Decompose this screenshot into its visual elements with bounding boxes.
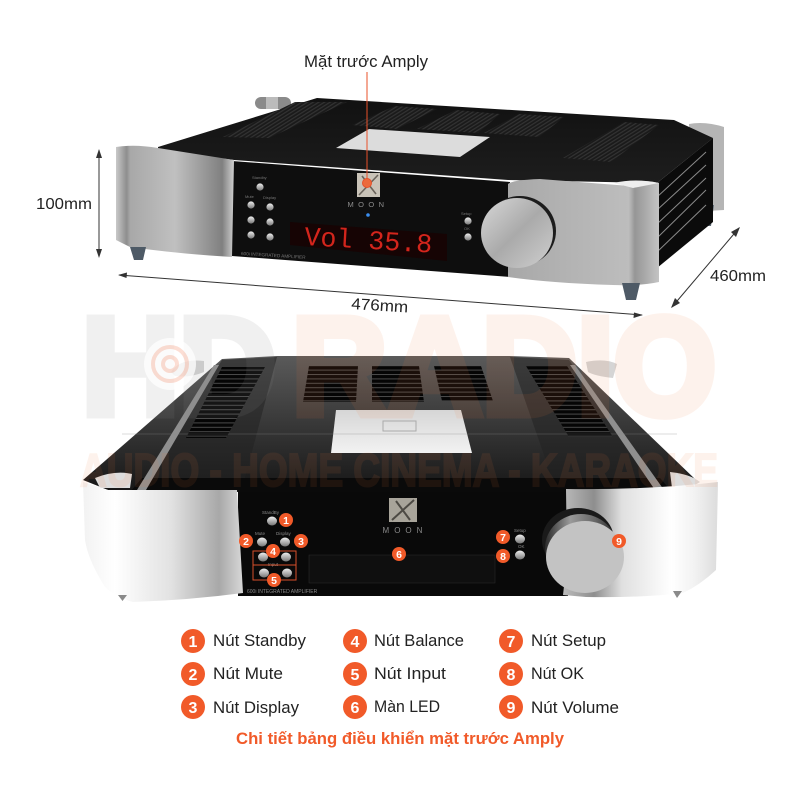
- front black panel: [232, 161, 510, 277]
- top amp small labels: Standby: [252, 175, 267, 180]
- numbered badges: 6: [396, 549, 402, 561]
- legend item 2: 2: [189, 667, 198, 684]
- watermark RADIO: RADIO: [292, 290, 716, 444]
- depth arrow 460mm: [671, 227, 740, 308]
- right rear foot: [700, 205, 714, 226]
- legend item 7: [499, 629, 606, 653]
- top cover: [158, 98, 713, 183]
- height label: 100mm: [36, 196, 92, 213]
- legend item 9: 9: [507, 700, 516, 717]
- lower small labels: [255, 510, 526, 567]
- numbered badges: 2: [243, 536, 249, 548]
- watermark target: [144, 338, 196, 390]
- caption: Chi tiết bảng điều khiển mặt trước Amply: [236, 730, 565, 748]
- top amp buttons: [247, 183, 472, 241]
- watermark HD RADIO: [80, 290, 718, 496]
- legend item 1: 1: [189, 634, 198, 651]
- legend item 8: [499, 662, 584, 686]
- legend item 3: [181, 695, 300, 719]
- lower plate: [331, 410, 472, 453]
- depth label: 460mm: [710, 268, 766, 285]
- numbered badges: 7: [500, 532, 506, 544]
- lower led screen: [309, 555, 495, 583]
- legend item 7: Nút Setup: [531, 632, 606, 650]
- lower small labels: Setup: [514, 528, 526, 533]
- legend item 6: 6: [351, 700, 360, 717]
- blue led: [366, 213, 370, 217]
- lower small labels: OK: [518, 544, 525, 549]
- legend item 2: [181, 662, 283, 686]
- model text: 600i INTEGRATED AMPLIFIER: [241, 251, 306, 260]
- watermark HD: HD: [82, 290, 276, 444]
- callout line and target: [362, 72, 372, 188]
- right cheek cap: [614, 180, 659, 188]
- legend item 6: Màn LED: [374, 698, 440, 716]
- height arrow 100mm: [96, 149, 102, 258]
- left silver cheek: [83, 482, 243, 602]
- lower top cover: [83, 356, 696, 492]
- heat sink fins: [657, 138, 713, 268]
- legend item 5: Nút Input: [374, 665, 446, 683]
- lower small labels: Display: [276, 531, 292, 536]
- top vents: [223, 102, 659, 162]
- moon text: MOON: [348, 200, 388, 209]
- bevel strips: [137, 365, 664, 490]
- moon logo: [357, 173, 380, 197]
- lower small labels: StandBy: [262, 510, 280, 515]
- top amp small labels: [245, 175, 472, 231]
- top white plate: [336, 129, 490, 157]
- led display: Vol 35.8: [303, 224, 433, 262]
- legend item 4: [343, 629, 464, 653]
- numbered badges: [239, 513, 626, 587]
- width label: 476mm: [351, 296, 409, 316]
- lower front panel: [238, 492, 568, 596]
- lower moon logo: [389, 498, 417, 522]
- rear corner caps: [171, 360, 617, 378]
- legend item 4: 4: [351, 634, 360, 651]
- lower moon text: MOON: [383, 526, 427, 535]
- top label: Mặt trước Amply: [304, 53, 429, 71]
- width arrow 476mm: [118, 272, 643, 318]
- lower buttons: [257, 516, 525, 578]
- numbered badges: 1: [283, 515, 289, 527]
- legend item 8: Nút OK: [531, 665, 584, 683]
- numbered badges: 4: [270, 546, 276, 558]
- legend item 9: Nút Volume: [531, 699, 619, 717]
- top amp small labels: OK: [464, 226, 470, 231]
- legend item 3: 3: [189, 700, 198, 717]
- legend item 1: [181, 629, 307, 653]
- back knob: [255, 97, 291, 109]
- legend: [181, 629, 619, 719]
- legend item 5: [343, 662, 446, 686]
- volume knob: [481, 196, 556, 268]
- lower model text: 600i INTEGRATED AMPLIFIER: [247, 589, 318, 595]
- numbered badges: 3: [298, 536, 304, 548]
- lower vents: [186, 366, 613, 438]
- top amp small labels: Mute: [245, 194, 255, 199]
- numbered badges: 9: [616, 536, 622, 548]
- left foot: [130, 247, 146, 260]
- right foot: [622, 283, 640, 300]
- right silver cheek: [508, 179, 659, 285]
- lower amplifier: [83, 356, 718, 602]
- numbered badges: 5: [271, 575, 277, 587]
- front corner caps: [95, 472, 700, 488]
- legend item 9: [499, 695, 619, 719]
- right silver cheek: [563, 482, 718, 597]
- balance and input frames: [253, 551, 296, 580]
- legend item 3: Nút Display: [213, 699, 300, 717]
- top amp small labels: Setup: [461, 211, 472, 216]
- side panels: [150, 357, 652, 478]
- top amplifier: [116, 97, 724, 300]
- volume knob: [542, 508, 624, 593]
- lower small labels: Mute: [255, 531, 266, 536]
- lower small labels: Input: [268, 562, 279, 567]
- legend item 7: 7: [507, 634, 516, 651]
- back right silver cheek: [689, 123, 724, 212]
- left silver cheek: [116, 146, 234, 257]
- legend item 5: 5: [351, 667, 360, 684]
- watermark rule: [122, 433, 677, 435]
- legend item 6: [343, 695, 440, 719]
- top amp small labels: Display: [263, 195, 276, 200]
- feet: [118, 591, 682, 601]
- legend item 2: Nút Mute: [213, 665, 283, 683]
- legend item 4: Nút Balance: [374, 632, 464, 650]
- front lip: [130, 478, 672, 492]
- numbered badges: 8: [500, 551, 506, 563]
- legend item 8: 8: [507, 667, 516, 684]
- legend item 1: Nút Standby: [213, 632, 307, 650]
